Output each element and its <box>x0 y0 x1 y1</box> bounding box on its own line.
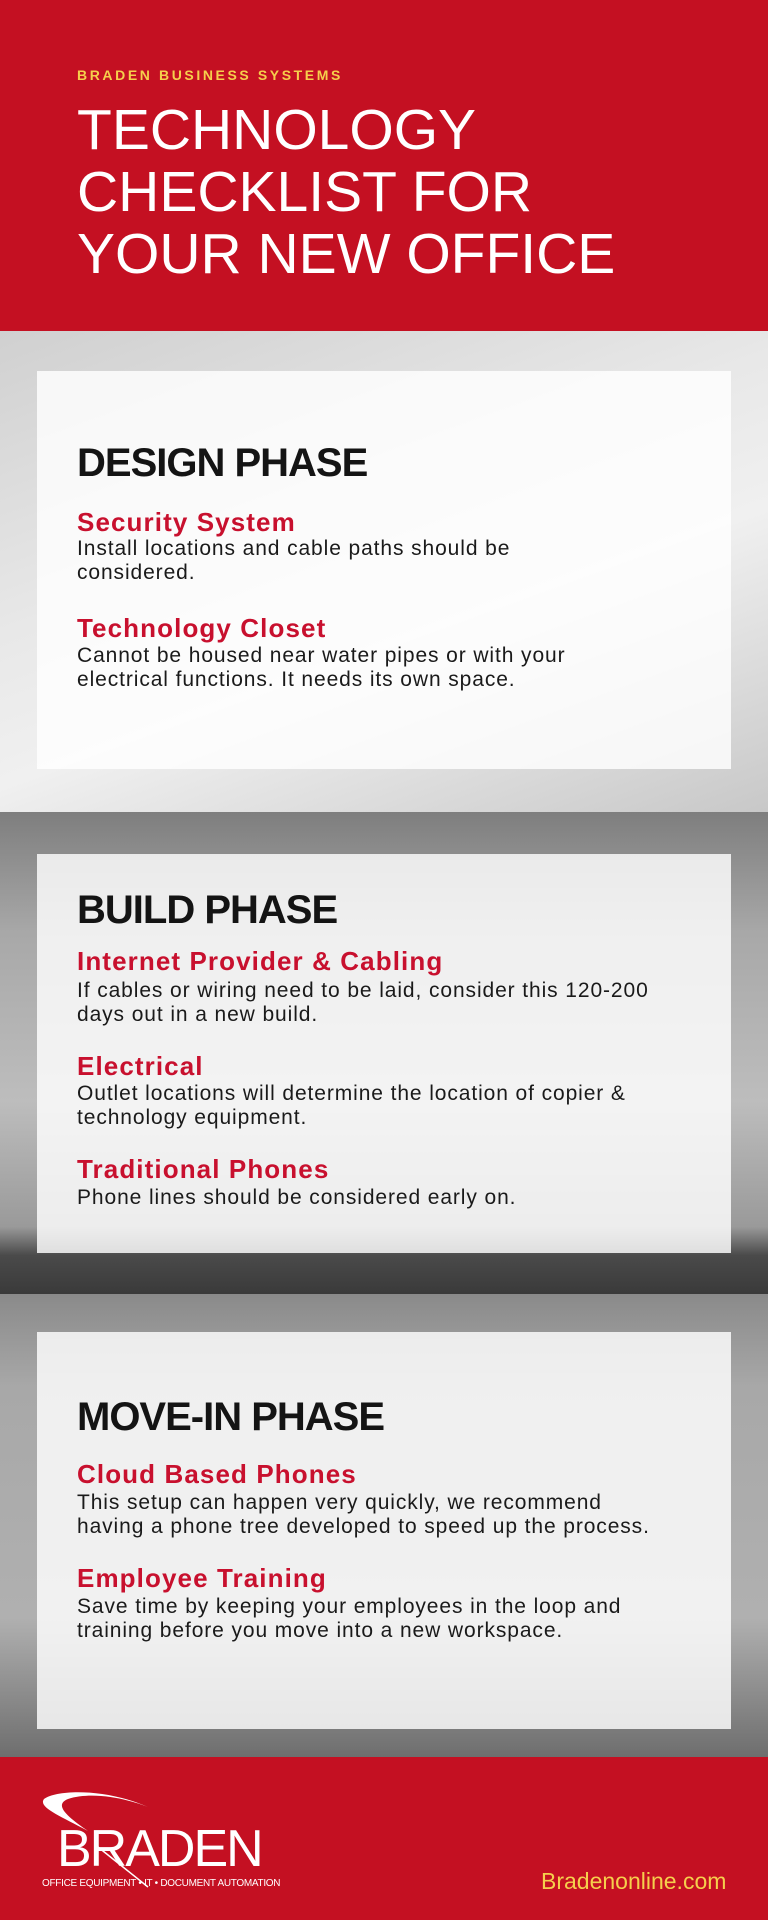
text: electrical: Outlet locations will determine the location of copier & <box>77 1082 626 1105</box>
text: security: Install locations and cable paths should be <box>77 537 510 560</box>
text: phones: Phone lines should be considered early on. <box>77 1186 516 1209</box>
logo wordmark: BRADEN <box>57 1820 262 1878</box>
text: cloud phones: This setup can happen very quickly, we recommend <box>77 1491 602 1514</box>
panel: move-in phase <box>37 1332 731 1729</box>
text: closet: electrical functions. It needs its own space. <box>77 668 516 691</box>
text: training <box>77 1595 621 1642</box>
subheading: internet: Internet Provider & Cabling <box>77 946 443 976</box>
icon: swoosh <box>42 1792 148 1888</box>
text: internet: days out in a new build. <box>77 1003 318 1026</box>
text: electrical: technology equipment. <box>77 1106 307 1129</box>
text: cloud phones <box>77 1491 650 1538</box>
brand label: BRADEN BUSINESS SYSTEMS <box>77 67 343 83</box>
text: electrical <box>77 1082 626 1129</box>
subheading: employee training: Employee Training <box>77 1563 327 1593</box>
title: YOUR NEW OFFICE <box>77 222 615 286</box>
logo tagline: OFFICE EQUIPMENT • IT • DOCUMENT AUTOMATION <box>42 1878 280 1889</box>
panel: build phase <box>37 854 731 1253</box>
section background: build <box>0 812 768 1294</box>
title <box>77 98 615 286</box>
subheading: electrical: Electrical <box>77 1051 204 1081</box>
section background: move-in <box>0 1294 768 1757</box>
website: Bradenonline.com <box>541 1868 726 1894</box>
panel: design phase <box>37 371 731 769</box>
subheading: traditional phones: Traditional Phones <box>77 1154 329 1184</box>
text: security: considered. <box>77 561 195 584</box>
heading: design phase: DESIGN PHASE <box>77 441 367 485</box>
text: internet <box>77 979 649 1026</box>
title: CHECKLIST FOR <box>77 160 532 224</box>
text: cloud phones: having a phone tree developed to speed up the process. <box>77 1515 650 1538</box>
heading: move-in phase: MOVE-IN PHASE <box>77 1395 384 1439</box>
title: TECHNOLOGY <box>77 98 476 162</box>
section background: design <box>0 331 768 812</box>
text: training: training before you move into a new workspace. <box>77 1619 563 1642</box>
header <box>0 0 768 331</box>
text: internet: If cables or wiring need to be laid, consider this 120-200 <box>77 979 649 1002</box>
subheading: cloud phones: Cloud Based Phones <box>77 1459 357 1489</box>
subheading: technology closet: Technology Closet <box>77 613 326 643</box>
footer <box>0 1757 768 1920</box>
subheading: security system: Security System <box>77 507 296 537</box>
text: closet <box>77 644 566 691</box>
text: training: Save time by keeping your employees in the loop and <box>77 1595 621 1618</box>
logo <box>42 1792 280 1889</box>
text: closet: Cannot be housed near water pipes or with your <box>77 644 566 667</box>
heading: build phase: BUILD PHASE <box>77 888 337 932</box>
text: security <box>77 537 510 584</box>
